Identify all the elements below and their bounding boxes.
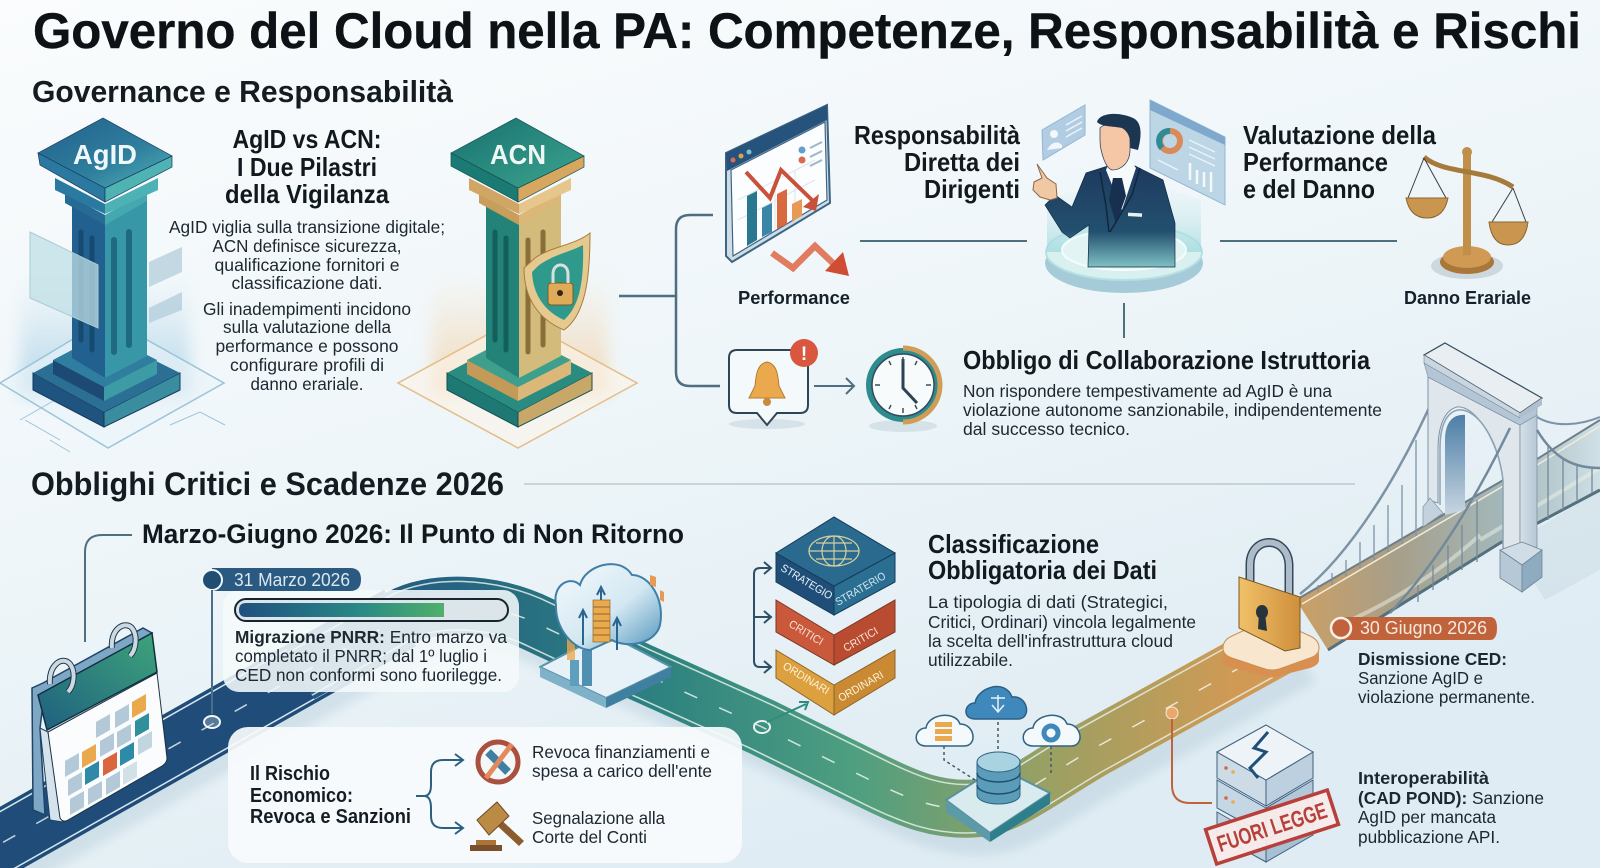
panel: rischio economico [228,727,742,863]
icon: notification bell: ! [801,344,807,365]
paragraph: vigilanza [169,217,445,394]
text: interoperabilita: Interoperabilità [1358,768,1489,788]
text: dismissione CED: Sanzione AgID e [1358,668,1483,688]
connector: road to outlawed server [1166,707,1212,803]
connector: road to data stack [754,702,808,733]
text: il rischio: Revoca e Sanzioni [250,806,411,828]
text: migrazione PNRR: CED non conformi sono fuorilegge. [235,665,502,685]
text: segnalazione: Segnalazione alla [532,808,665,828]
text: interoperabilita: (CAD POND): Sanzione [1358,788,1544,808]
paragraph: vigilanza: configurare profili di [230,355,384,375]
tier labels: ORDINARI [836,669,886,705]
connector: ACN to responsibilities [619,215,720,386]
date tag: 30 giugno [1331,617,1497,640]
text: dismissione CED [1358,649,1535,707]
arrow: bracket [416,754,463,834]
date tag: 31 Marzo 2026 [234,570,350,590]
text block: obbligo di collaborazione [963,345,1382,439]
text: valutazione performance: Performance [1243,147,1388,177]
date tag: 30 giugno: 30 Giugno 2026 [1360,618,1487,638]
arrow: bell to clock [814,378,854,394]
text: segnalazione [532,808,665,847]
text: valutazione performance [1243,120,1436,204]
heading: obblighi critici: Obblighi Critici e Scadenze 2026 [31,466,504,502]
text: migrazione PNRR: Migrazione PNRR: Entro marzo va [235,627,507,647]
pillar: AgID [0,118,225,452]
body: classificazione: la scelta dell'infrastruttura cloud [928,631,1173,651]
bridge back cables [1300,390,1600,594]
tier labels: CRITICI [786,618,825,648]
paragraph: vigilanza: performance e possono [216,336,398,356]
tier labels: CRITICI [842,625,880,655]
tier labels: STRATERIO [834,570,888,609]
icon: clock [866,348,940,432]
heading: marzo-giugno [85,519,684,642]
text: revoca finanziamenti: Revoca finanziamenti e [532,742,710,762]
paragraph: vigilanza: sulla valutazione della [223,317,391,337]
text block: classificazione [928,529,1196,670]
icon: gavel [470,802,524,851]
icon: shield with padlock [524,233,590,330]
stamp: fuori legge: FUORI LEGGE [1214,797,1330,857]
icon: broken server with stamp [1206,725,1338,864]
body: obbligo [963,381,1382,439]
text: valutazione performance: e del Danno [1243,174,1375,204]
text: interoperabilita: pubblicazione API. [1358,827,1500,847]
heading: due pilastri: AgID vs ACN: [232,124,382,154]
icon: revoked funds [478,742,518,782]
text: responsabilita dirigenti [854,120,1020,204]
icon: falling arrow [772,246,838,268]
text: responsabilita dirigenti: Diretta dei [904,147,1020,177]
connector: manager to obligation [1123,303,1125,338]
body: classificazione: Critici, Ordinari) vincola legalmente [928,612,1196,632]
body: obbligo: Non rispondere tempestivamente ad AgID è una [963,381,1332,401]
icon: calendar [32,625,167,822]
heading: obbligo: Obbligo di Collaborazione Istruttoria [963,345,1370,375]
title: Governo del Cloud nella PA: Competenze, Responsabilità e Rischi [33,3,1581,59]
road: timeline path [0,606,1302,868]
body: classificazione [928,592,1196,670]
label: danno erariale: Danno Erariale [1404,287,1531,308]
bridge [1296,343,1600,650]
text: revoca finanziamenti [532,742,712,781]
heading: due pilastri: I Due Pilastri [237,152,377,182]
text: valutazione performance: Valutazione della [1243,120,1436,150]
heading: classificazione: Classificazione [928,529,1099,559]
text: il rischio [250,763,411,828]
icon: scales [1406,147,1528,279]
tier labels: ORDINARI [780,660,831,697]
callout: 31 marzo milestone [202,568,519,728]
illustration: manager on platform [1033,100,1225,293]
bridge tower [1423,343,1542,592]
icon: cloud migration node [540,564,671,708]
paragraph: vigilanza: danno erariale. [250,374,364,394]
text: interoperabilita: AgID per mancata [1358,807,1496,827]
text: dismissione CED: Dismissione CED: [1358,649,1507,669]
calendar cells [65,694,152,815]
ACN label: ACN [490,139,546,170]
body: obbligo: dal successo tecnico. [963,419,1130,439]
tier labels: STRATEGIO [778,562,835,603]
heading: classificazione: Obbligatoria dei Dati [928,555,1157,585]
text: revoca finanziamenti: spesa a carico dell'ente [532,761,712,781]
paragraph: vigilanza: ACN definisce sicurezza, [212,236,402,256]
body: classificazione: La tipologia di dati (Strategici, [928,592,1168,612]
date tag [202,568,361,591]
paragraph: vigilanza: AgID viglia sulla transizione digitale; [169,217,445,237]
progress bar [235,599,508,621]
connector: performance to manager [860,240,1027,242]
text: responsabilita dirigenti: Responsabilità [854,120,1020,150]
pillar: ACN [398,118,637,448]
tier labels [778,562,888,705]
text: segnalazione: Corte del Conti [532,827,647,847]
body: obbligo: violazione autonome sanzionabile, indipendentemente [963,400,1382,420]
heading: governance: Governance e Responsabilità [32,74,454,109]
heading: marzo-giugno: Marzo-Giugno 2026: Il Punto di Non Ritorno [142,519,684,549]
heading: due pilastri: della Vigilanza [225,179,389,209]
label: performance: Performance [738,287,850,308]
icon: clouds and database node [916,687,1080,842]
paragraph: vigilanza: Gli inadempimenti incidono [203,299,411,319]
icon: globe [809,536,859,566]
text: il rischio: Economico: [250,785,353,807]
data classification stack [776,517,895,715]
text: dismissione CED: violazione permanente. [1358,687,1535,707]
connector: manager to damage [1220,240,1397,242]
paragraph: vigilanza: qualificazione fornitori e [214,255,400,275]
heading: classificazione [928,529,1157,585]
body: classificazione: utilizzabile. [928,650,1013,670]
text: migrazione PNRR: completato il PNRR; dal 1º luglio i [235,646,487,666]
text: responsabilita dirigenti: Dirigenti [924,174,1020,204]
AgID label: AgID [73,139,137,170]
text: interoperabilita [1358,768,1544,847]
arrows: bracket to data tiers [754,562,771,673]
text: il rischio: Il Rischio [250,763,330,785]
text block: AgID vs ACN [169,124,445,394]
icon: performance dashboard [726,105,849,276]
icon: notification bell [729,339,818,429]
heading: due pilastri [225,124,389,209]
bridge front cables [1390,428,1600,613]
icon: padlock on road [1223,542,1319,678]
paragraph: vigilanza: classificazione dati. [232,273,382,293]
text: migrazione PNRR [235,627,507,685]
